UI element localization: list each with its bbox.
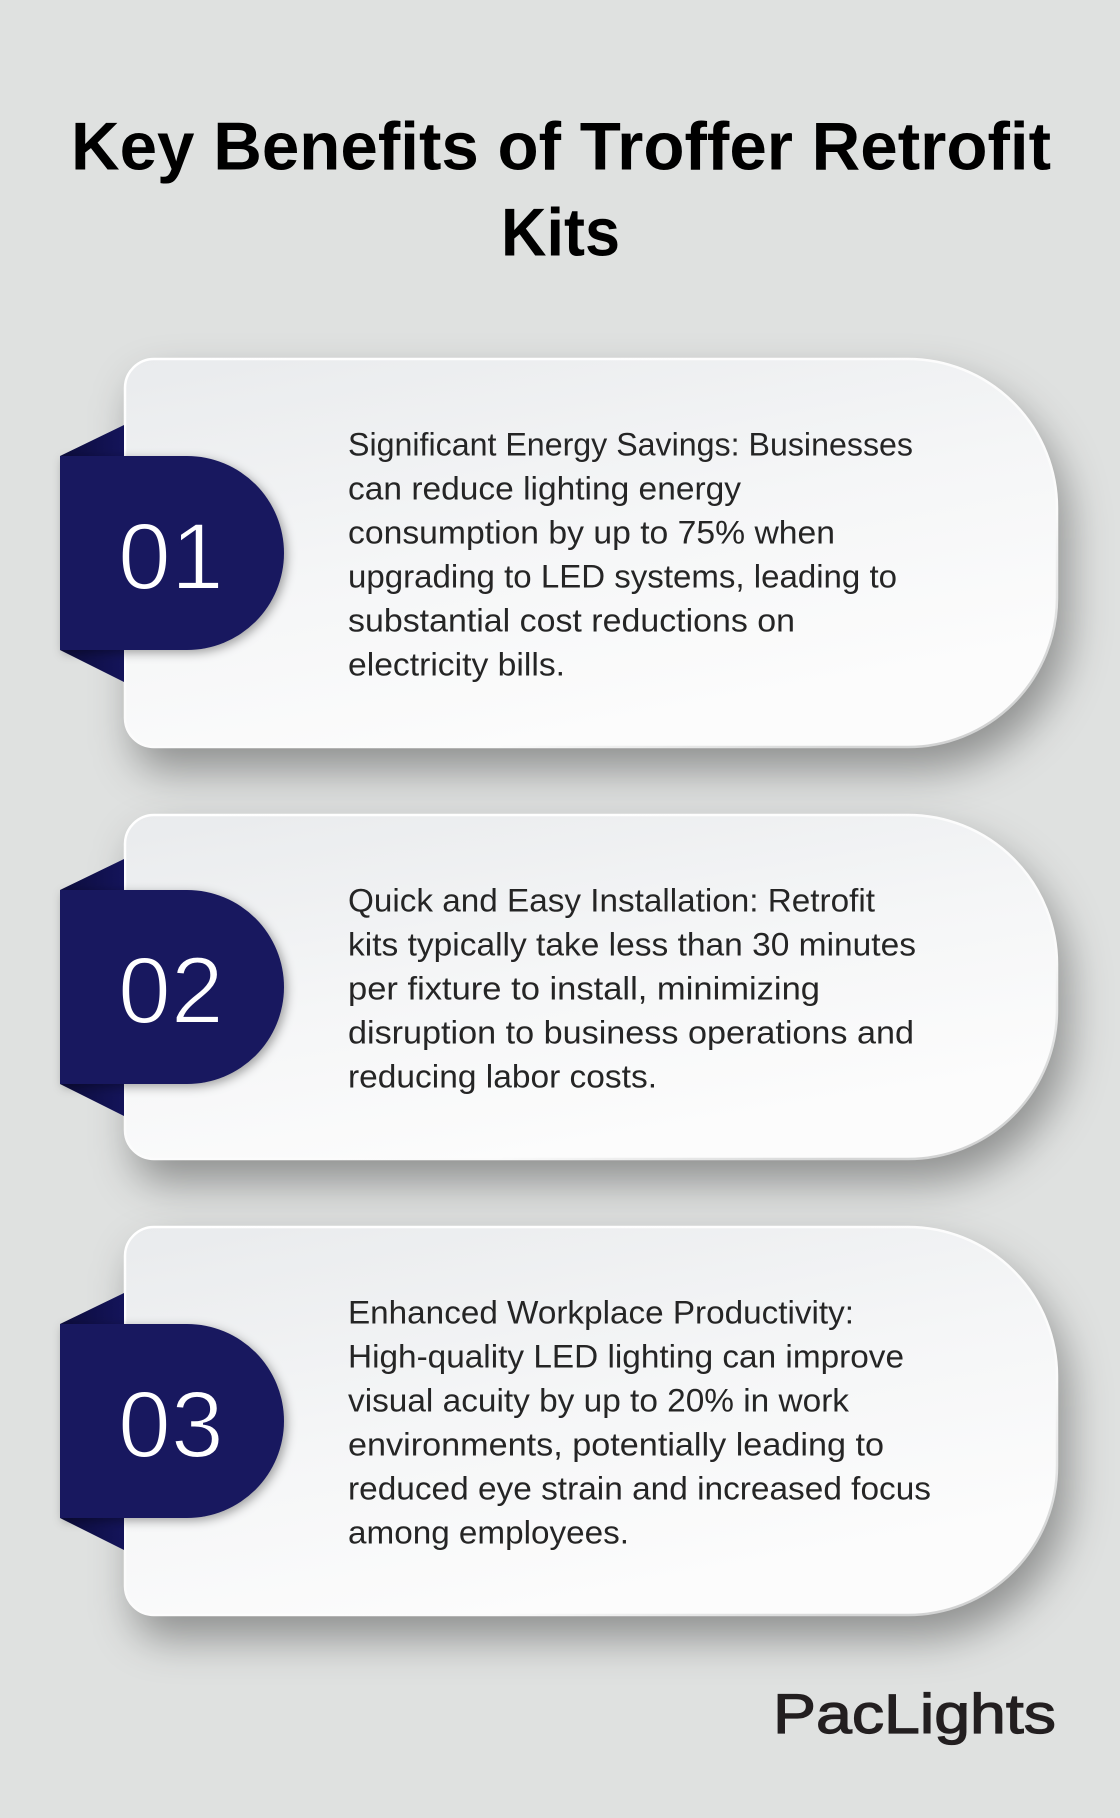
badge: 03 xyxy=(60,1293,287,1550)
text: workplace productivity: among employees. xyxy=(348,1515,629,1551)
text: quick installation: reducing labor costs. xyxy=(348,1059,657,1095)
text: quick installation xyxy=(348,883,916,1095)
text: energy savings: consumption by up to 75% when xyxy=(348,515,835,551)
panel: energy savings xyxy=(60,359,1068,770)
panel: quick installation xyxy=(60,815,1068,1182)
badge: 02: 02 xyxy=(118,938,224,1044)
text: workplace productivity: High-quality LED lighting can improve xyxy=(348,1339,904,1375)
title xyxy=(71,108,1051,270)
text: energy savings: Significant Energy Savings: Businesses xyxy=(348,427,913,463)
text: workplace productivity: Enhanced Workplace Productivity: xyxy=(348,1295,854,1331)
text: quick installation: Quick and Easy Installation: Retrofit xyxy=(348,883,875,919)
text: quick installation: per fixture to install, minimizing xyxy=(348,971,820,1007)
text: workplace productivity: reduced eye strain and increased focus xyxy=(348,1471,931,1507)
text: workplace productivity xyxy=(348,1295,931,1551)
badge: 02 xyxy=(60,859,287,1116)
text: energy savings: upgrading to LED systems, leading to xyxy=(348,559,897,595)
panel: workplace productivity xyxy=(60,1227,1068,1638)
badge: 03: 03 xyxy=(118,1372,224,1478)
text: quick installation: kits typically take less than 30 minutes xyxy=(348,927,916,963)
badge: 01 xyxy=(60,425,287,682)
text: energy savings: substantial cost reductions on xyxy=(348,603,795,639)
text: energy savings: electricity bills. xyxy=(348,647,565,683)
text: workplace productivity: visual acuity by up to 20% in work xyxy=(348,1383,850,1419)
title: Kits xyxy=(501,194,620,270)
text: quick installation: disruption to business operations and xyxy=(348,1015,914,1051)
logo: PacLights: PacLights xyxy=(773,1682,1056,1745)
title: Key Benefits of Troffer Retrofit xyxy=(71,108,1051,184)
text: workplace productivity: environments, potentially leading to xyxy=(348,1427,884,1463)
text: energy savings xyxy=(348,427,913,683)
text: energy savings: can reduce lighting energy xyxy=(348,471,741,507)
badge: 01: 01 xyxy=(118,504,224,610)
